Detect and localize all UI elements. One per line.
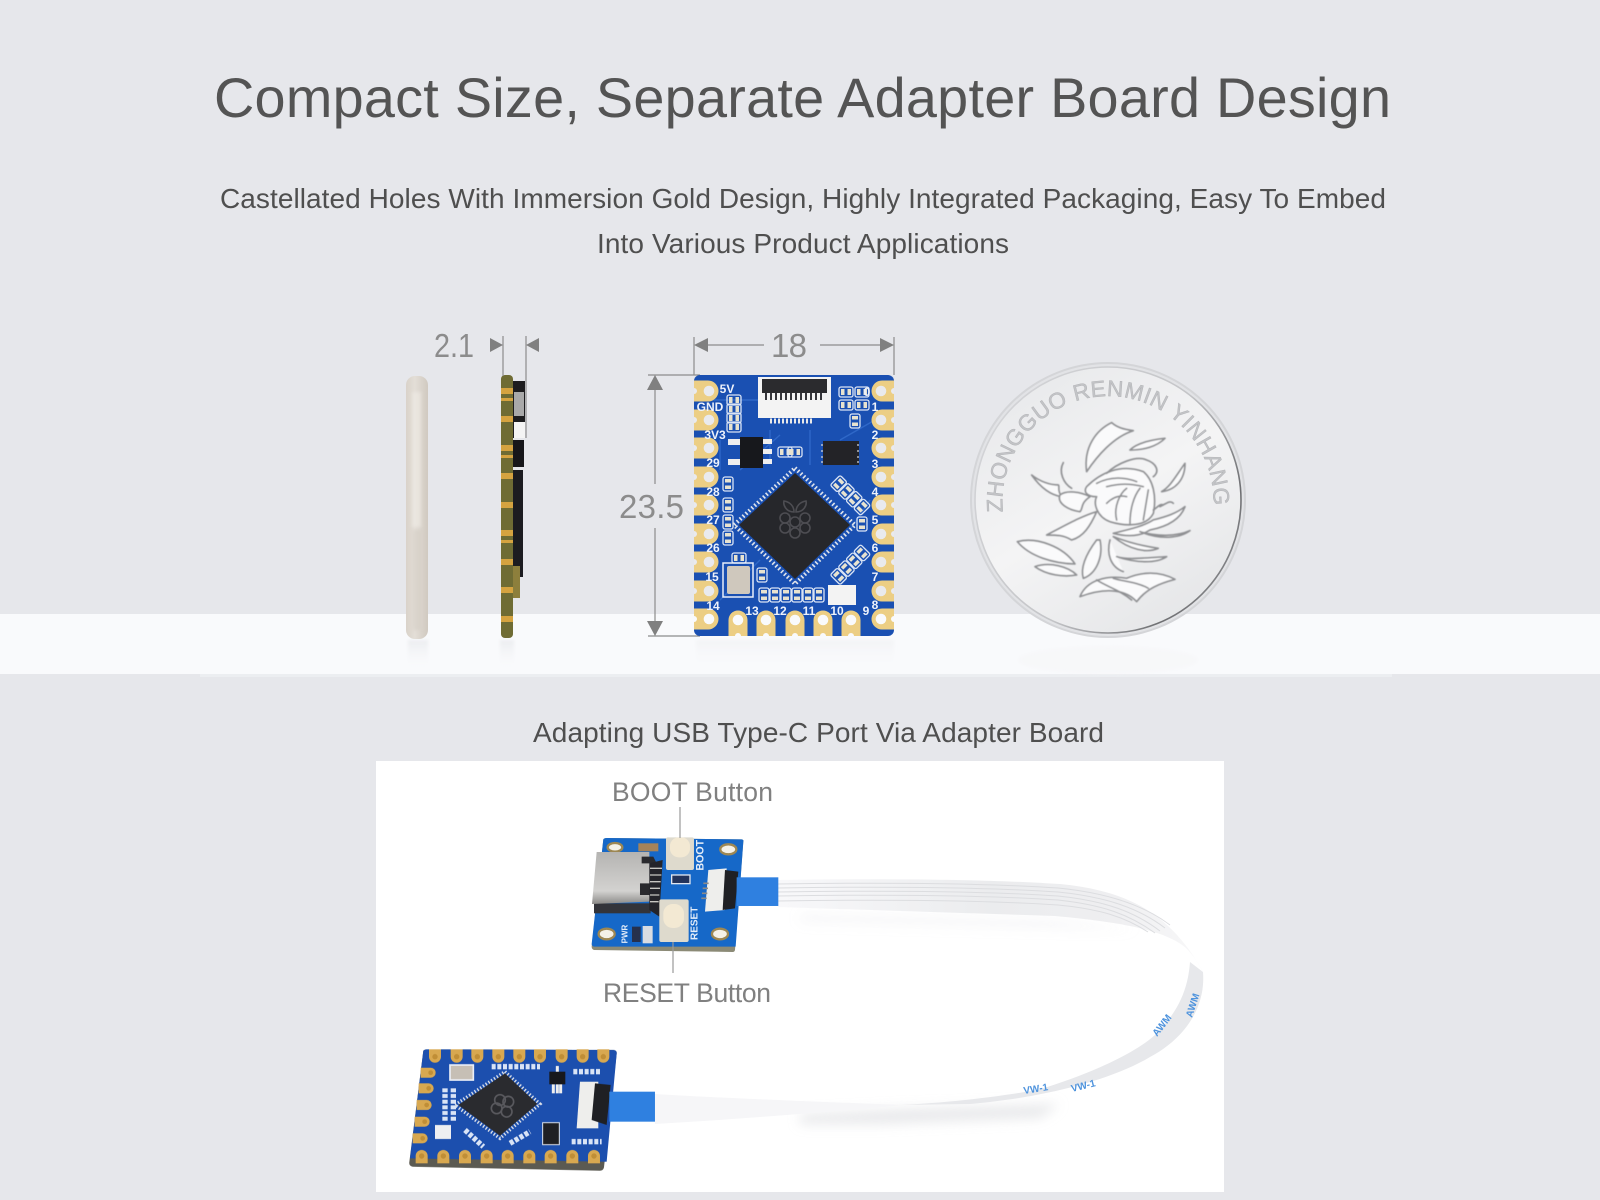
FPC connector: [701, 868, 738, 912]
USB Type-C connector: [592, 852, 663, 917]
silkscreen pin labels: 4: [872, 485, 879, 499]
regulator: [728, 437, 772, 468]
subtitle: Castellated Holes With Immersion Gold Design, Highly Integrated Packaging, Easy To Embed: [220, 183, 1386, 214]
lower board connected to the cable: [409, 1049, 655, 1171]
RP2040 chip: [455, 1072, 540, 1138]
callout line: BOOT button: [679, 807, 681, 838]
silkscreen pin labels: 1: [872, 400, 879, 414]
components: [435, 1065, 602, 1147]
ribbon shadow: [800, 914, 1140, 1124]
reflections on shelf: [408, 640, 1198, 674]
one yuan coin: [970, 362, 1246, 638]
coin seen from the side: [406, 376, 428, 639]
white display shelf: [0, 614, 1600, 677]
silkscreen pin labels: 11: [803, 604, 816, 618]
blue tab: [737, 877, 778, 906]
silkscreen pin labels: 8: [872, 598, 879, 612]
RGB LED: [828, 585, 856, 605]
castellated pads: [694, 380, 894, 636]
blue tab: [609, 1092, 655, 1122]
mounting holes: [599, 843, 736, 939]
silkscreen pin labels: 28: [706, 485, 720, 499]
callout label: RESET button: RESET Button: [603, 978, 771, 1008]
silkscreen pin labels: 7: [872, 570, 879, 584]
blue print on the cable: [1023, 992, 1202, 1097]
silkscreen pin labels: 27: [706, 513, 720, 527]
silkscreen pin labels: 15: [705, 570, 719, 584]
board seen from the side: [501, 375, 525, 638]
flash memory IC: [821, 441, 861, 465]
dimension: height 23.5: [619, 375, 700, 636]
dimension: thickness 2.1: 2.1: [434, 327, 474, 364]
chrysanthemum relief: [1017, 423, 1190, 602]
RESET button: RESET: [689, 907, 700, 940]
silkscreen pin labels: 29: [706, 456, 720, 470]
crystal: [723, 563, 753, 597]
silkscreen pin labels: 0: [864, 385, 871, 399]
callout label: BOOT button: BOOT Button: [612, 777, 773, 807]
RP2040 chip: [734, 468, 855, 584]
dimension: thickness 2.1: [434, 327, 539, 438]
silkscreen pin labels: [697, 382, 879, 618]
photo panel: [376, 761, 1224, 1192]
adapter board: [592, 837, 778, 952]
blue print on the cable: AWM: [1151, 1013, 1174, 1039]
RESET button: PWR: [620, 924, 629, 943]
silkscreen pin labels: 10: [830, 604, 844, 618]
silkscreen pin labels: 14: [706, 599, 720, 613]
flat ribbon cable: [655, 879, 1203, 1124]
silkscreen pin labels: 5V: [720, 382, 734, 396]
dimension: height 23.5: 23.5: [619, 488, 684, 525]
coin inscription: ZHONGGUO RENMIN YINHANG: [986, 380, 1230, 512]
silkscreen pin labels: 5: [872, 513, 879, 527]
pcb base: [694, 375, 894, 636]
blue print on the cable: AWM: [1184, 992, 1202, 1019]
FPC connector: [577, 1082, 611, 1128]
RESET button: [620, 843, 700, 943]
silkscreen pin labels: 6: [872, 541, 879, 555]
title: Compact Size, Separate Adapter Board Design: [214, 66, 1391, 129]
silkscreen pin labels: 9: [863, 604, 870, 618]
FPC connector: [758, 377, 831, 421]
subtitle: [220, 183, 1386, 259]
small passive components: [723, 387, 871, 602]
silkscreen pin labels: 2: [872, 428, 879, 442]
blue print on the cable: VW-1: [1023, 1082, 1049, 1097]
blue print on the cable: VW-1: [1070, 1078, 1097, 1095]
dimension: width 18: [694, 327, 894, 375]
silkscreen pin labels: GND: [697, 400, 724, 414]
BOOT button: BOOT: [694, 839, 706, 871]
heading: adapter section: Adapting USB Type-C Port Via Adapter Board: [533, 717, 1104, 748]
gold pads: [413, 1049, 609, 1163]
silkscreen pin labels: 26: [706, 541, 720, 555]
callout line: RESET button: [672, 942, 674, 973]
main board top view: [694, 375, 894, 636]
silkscreen pin labels: 13: [745, 604, 759, 618]
BOOT button: [666, 837, 706, 884]
silkscreen pin labels: 3V3: [704, 428, 726, 442]
silkscreen pin labels: 3: [872, 457, 879, 471]
silkscreen pin labels: 12: [773, 604, 787, 618]
dimension: width 18: 18: [771, 327, 807, 364]
subtitle: Into Various Product Applications: [597, 228, 1009, 259]
